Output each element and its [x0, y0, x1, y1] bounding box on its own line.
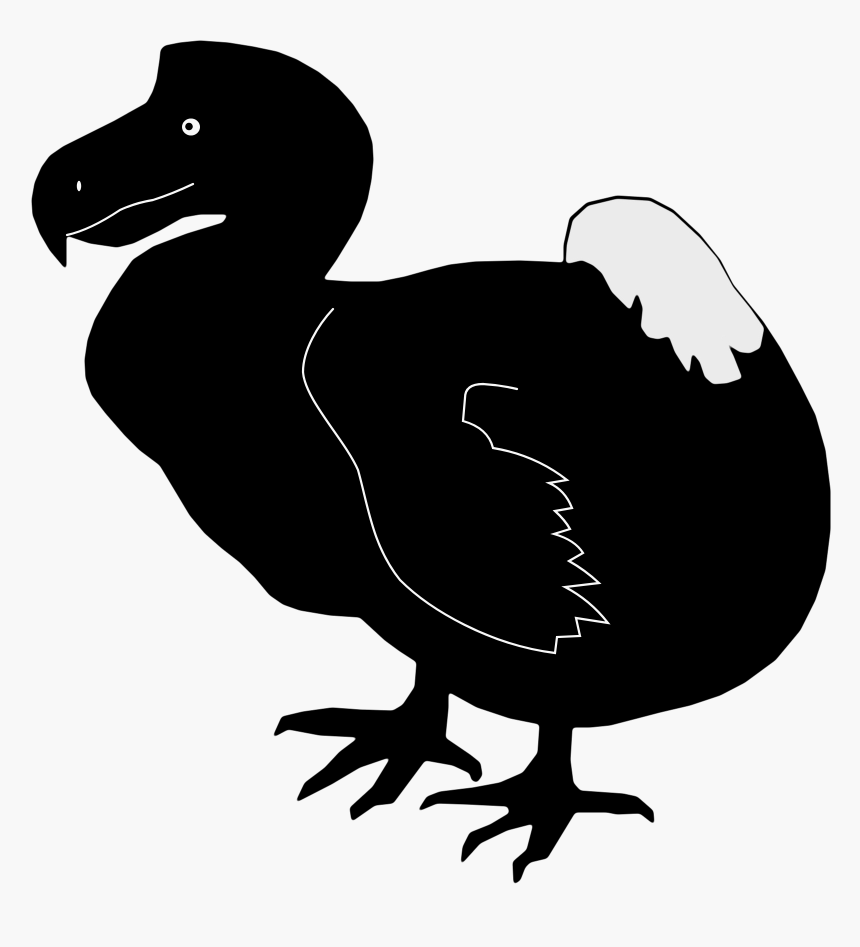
- nostril: [77, 181, 81, 191]
- tail feathers: [566, 199, 764, 384]
- beak line: [67, 184, 193, 235]
- eye: [182, 118, 200, 136]
- wing outline: [303, 309, 608, 653]
